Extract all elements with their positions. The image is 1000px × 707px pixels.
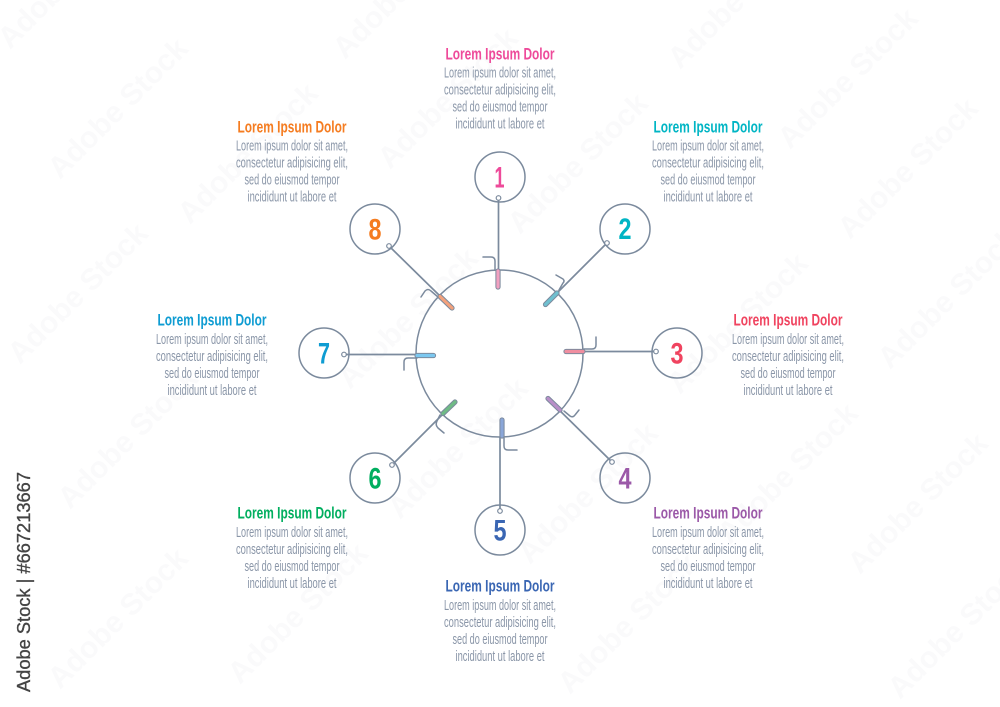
step 4: pin [548,398,612,462]
step 7: text block: Lorem ipsum dolor sit amet, [156,332,268,348]
step 6: text block [236,504,348,592]
step 3: text block: Lorem Ipsum Dolor [734,310,843,330]
step 2: number badge [600,204,650,254]
step 3: text block [732,310,844,399]
step 7: text block: consectetur adipisicing elit, [156,349,268,365]
background watermark: Adobe Stock [2,217,155,370]
step 1: number badge: 1 [494,162,504,194]
step 8: text block: Lorem ipsum dolor sit amet, [236,138,348,154]
step 4: text block: incididunt ut labore et [664,576,752,592]
step 3: pin [566,337,656,352]
step 6: text block: incididunt ut labore et [248,576,336,592]
step 2: number badge: 2 [618,213,632,246]
step 1: text block: Lorem ipsum dolor sit amet, [444,66,556,82]
background watermark: Adobe Stock [222,537,375,690]
background watermark: Adobe Stock [172,77,325,230]
step 3: number badge: 3 [670,338,684,370]
step 8: text block: consectetur adipisicing elit, [236,156,348,172]
background watermark: Adobe Stock [832,92,985,245]
step 7: number badge [299,328,349,378]
step 6: number badge [350,453,400,503]
step 2: text block: consectetur adipisicing elit, [652,156,764,172]
step 7: text block: sed do eiusmod tempor [164,366,260,382]
step 7: text block: incididunt ut labore et [168,383,256,399]
step 5: number badge [475,505,525,555]
step 5: text block [444,576,556,665]
step 3: text block: incididunt ut labore et [744,383,832,399]
step 1: text block: incididunt ut labore et [456,116,544,132]
step 7: text block: Lorem Ipsum Dolor [158,310,267,330]
step 8: text block: sed do eiusmod tempor [244,172,340,188]
background watermark: Adobe Stock [372,22,525,175]
step 1: pin [483,198,498,288]
background watermark: Adobe Stock [772,2,925,155]
step 5: text block: sed do eiusmod tempor [452,632,548,648]
step 6: text block: Lorem Ipsum Dolor [238,504,347,522]
step 5: text block: Lorem ipsum dolor sit amet, [444,598,556,614]
step 2: pin [546,243,607,304]
stock credit: Adobe Stock | #667213667 [14,472,34,692]
step 8: text block [236,118,348,206]
background watermark: Adobe Stock [42,542,195,695]
background watermark: Adobe Stock [842,427,995,580]
step 1: text block: Lorem Ipsum Dolor [446,44,555,64]
step 5: pin [500,420,517,511]
step 6: number badge: 6 [368,462,382,496]
step 6: text block: consectetur adipisicing elit, [236,542,348,558]
step 6: pin [392,402,455,465]
background watermark: Adobe Stock [662,247,815,400]
step 6: text block: sed do eiusmod tempor [244,559,340,575]
step 4: text block: consectetur adipisicing elit, [652,542,764,558]
step 2: text block [652,118,764,206]
step 7: number badge: 7 [318,338,330,370]
step 4: number badge [600,453,650,503]
step 2: text block: sed do eiusmod tempor [660,172,756,188]
step 4: number badge: 4 [618,462,632,496]
step 4: text block: Lorem ipsum dolor sit amet, [652,525,764,541]
background watermark: Adobe Stock [382,372,535,525]
step 3: number badge [652,328,702,378]
step 8: number badge: 8 [368,214,382,246]
step 1: number badge [475,152,525,202]
step 8: pin [389,246,452,308]
step 5: text block: Lorem Ipsum Dolor [446,576,555,596]
step 4: text block: Lorem Ipsum Dolor [654,504,763,522]
background watermark: Adobe Stock [712,397,865,550]
background watermark: Adobe Stock [42,32,195,185]
step 6: text block: Lorem ipsum dolor sit amet, [236,525,348,541]
step 3: text block: sed do eiusmod tempor [740,366,836,382]
step 8: text block: Lorem Ipsum Dolor [238,118,347,136]
background watermark: Adobe Stock [502,87,655,240]
step 7: text block [156,310,268,399]
step 2: text block: Lorem ipsum dolor sit amet, [652,138,764,154]
step 3: text block: consectetur adipisicing elit, [732,349,844,365]
central circle [416,270,583,437]
step 5: number badge: 5 [494,514,506,548]
step 1: text block: consectetur adipisicing elit, [444,82,556,98]
step 2: text block: Lorem Ipsum Dolor [654,118,763,136]
step 4: text block [652,504,764,592]
step 8: text block: incididunt ut labore et [248,190,336,206]
background watermark: Adobe Stock [512,417,665,570]
background watermark: Adobe Stock [332,242,485,395]
step 2: text block: incididunt ut labore et [664,190,752,206]
step 5: text block: incididunt ut labore et [456,649,544,665]
step 5: text block: consectetur adipisicing elit, [444,615,556,631]
step 1: text block [444,44,556,132]
background watermark: Adobe Stock [52,362,205,515]
step 4: text block: sed do eiusmod tempor [660,559,756,575]
step 8: number badge [350,204,400,254]
step 1: text block: sed do eiusmod tempor [452,100,548,116]
step 3: text block: Lorem ipsum dolor sit amet, [732,332,844,348]
background watermark: Adobe Stock [552,547,705,700]
step 7: pin [344,354,434,370]
